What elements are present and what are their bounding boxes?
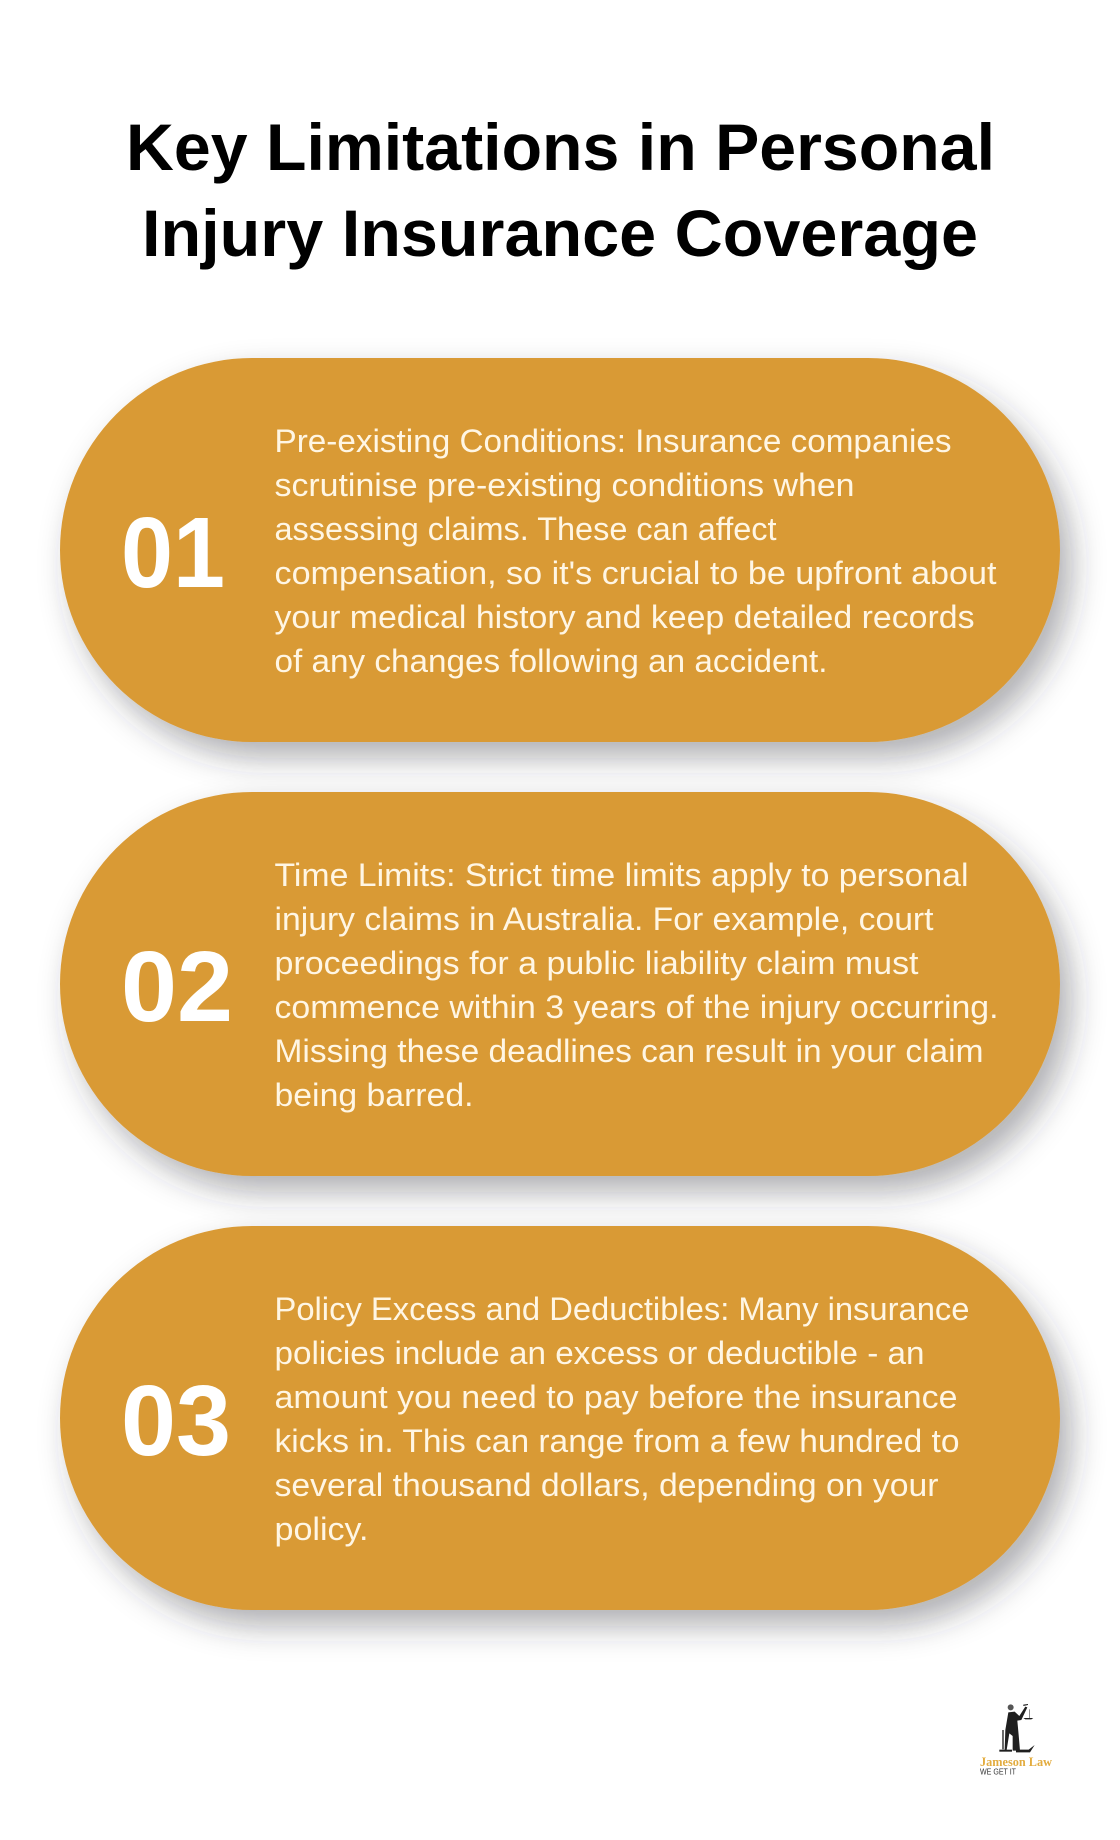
panel: time limits (60, 792, 1060, 1176)
pill background 02 (60, 792, 1060, 1176)
text block 02: commence within 3 years of the injury occurring. (274, 989, 998, 1025)
number 02: 02 (121, 931, 233, 1043)
pill background 03 (60, 1226, 1060, 1610)
logo wordmark: Jameson Law (980, 1755, 1052, 1769)
title: Injury Insurance Coverage (142, 196, 978, 270)
text block 01: compensation, so it's crucial to be upfront about (274, 555, 997, 591)
text block 03: kicks in. This can range from a few hundred to (274, 1423, 960, 1459)
title (126, 110, 995, 270)
text block 02: injury claims in Australia. For example, court (274, 901, 934, 937)
text block 02: proceedings for a public liability claim must (274, 945, 919, 981)
text block 03 (274, 1291, 970, 1547)
logo: Jameson Law (980, 1704, 1052, 1776)
text block 01: Pre-existing Conditions: Insurance companies (274, 423, 952, 459)
text block 03: policy. (274, 1511, 368, 1547)
text block 02 (274, 857, 998, 1113)
icon: lady justice (999, 1704, 1035, 1752)
text block 02: Time Limits: Strict time limits apply to personal (274, 857, 968, 893)
text block 01: scrutinise pre-existing conditions when (274, 467, 854, 503)
text block 03: amount you need to pay before the insurance (274, 1379, 958, 1415)
title: Key Limitations in Personal (126, 110, 995, 184)
text block 03: several thousand dollars, depending on your (274, 1467, 939, 1503)
pill background 01 (60, 358, 1060, 742)
text block 03: policies include an excess or deductible - an (274, 1335, 924, 1371)
text block 01 (274, 423, 997, 679)
panel: pre-existing conditions (60, 358, 1060, 742)
number 01: 01 (121, 497, 225, 609)
logo tagline: WE GET IT (980, 1768, 1016, 1776)
number 03: 03 (121, 1365, 231, 1477)
panel: policy excess and deductibles (60, 1226, 1060, 1610)
text block 02: being barred. (274, 1077, 474, 1113)
text block 01: assessing claims. These can affect (274, 511, 777, 547)
text block 03: Policy Excess and Deductibles: Many insurance (274, 1291, 970, 1327)
text block 01: your medical history and keep detailed records (274, 599, 974, 635)
text block 02: Missing these deadlines can result in your claim (274, 1033, 984, 1069)
text block 01: of any changes following an accident. (274, 643, 828, 679)
